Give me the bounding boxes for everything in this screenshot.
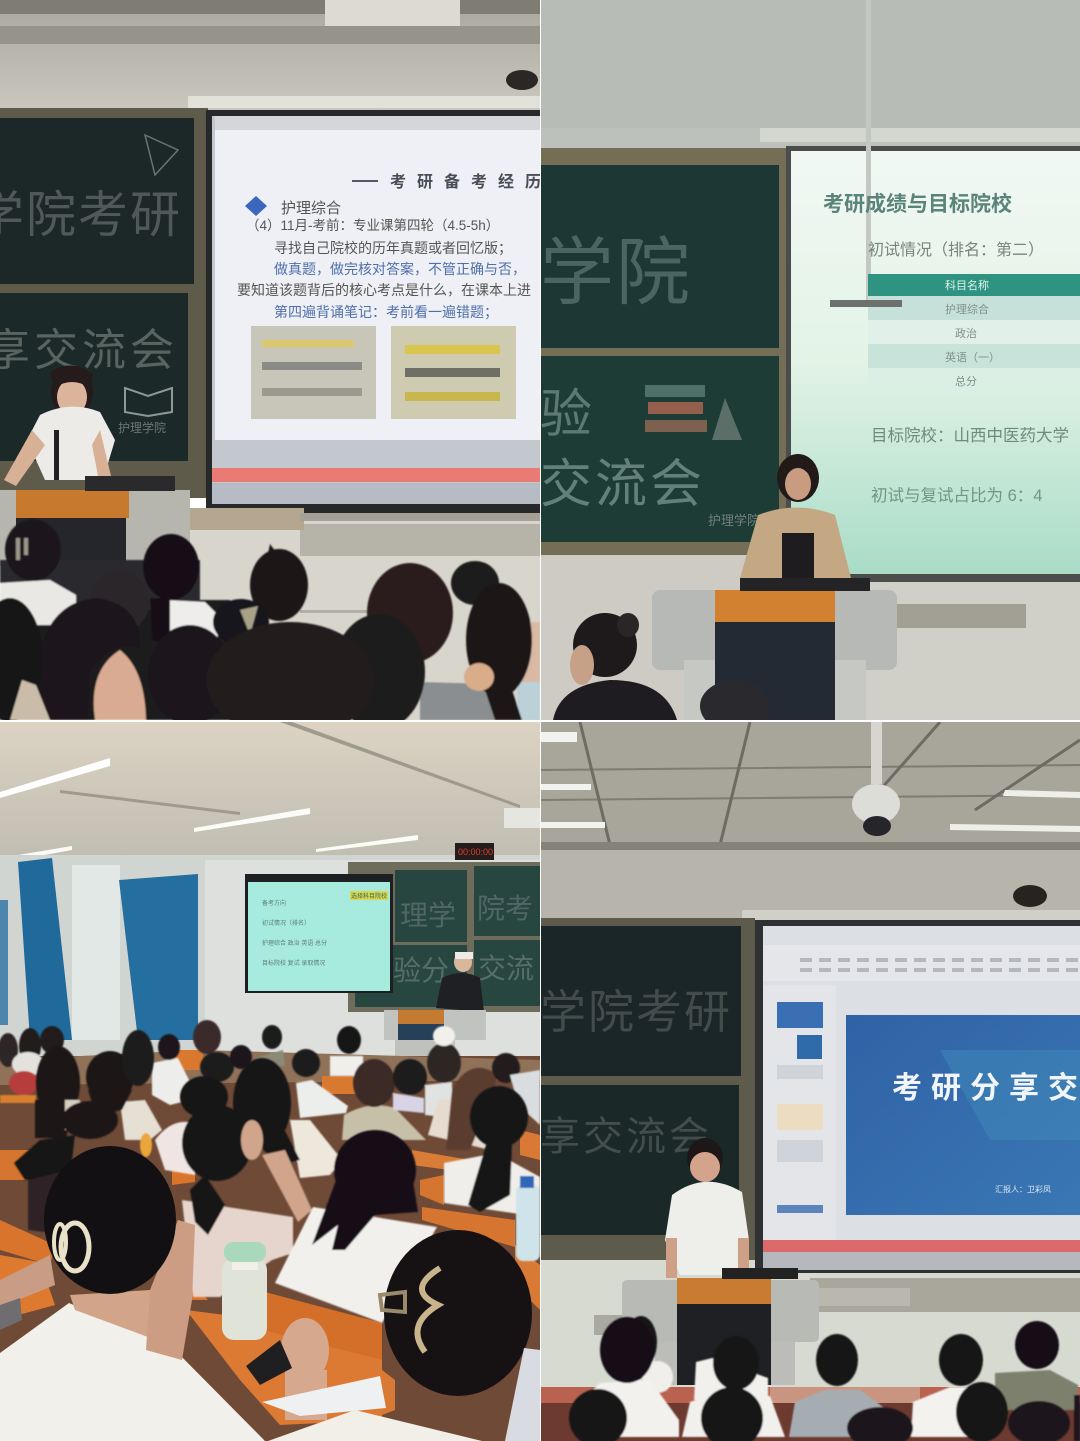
blackboard [348, 843, 540, 1012]
ceiling [541, 722, 1080, 850]
projection screen: 第四遍背诵笔记：考前看一遍错题； [274, 304, 498, 321]
ceiling and wall [0, 0, 540, 110]
speaker and podium [384, 952, 486, 1062]
blackboard [540, 918, 755, 1260]
audience [0, 519, 540, 738]
panel: top-left lecture photo [0, 0, 552, 720]
window and curtains [0, 858, 198, 1040]
projection screen [245, 874, 393, 993]
blackboard: 享交流会 [540, 1115, 712, 1159]
projection screen: 目标院校：山西中医药大学 [871, 426, 1069, 445]
projection screen: 政治 [955, 326, 977, 340]
projection screen: 科目名称 [945, 278, 989, 292]
projection screen: 考研成绩与目标院校 [823, 192, 1012, 216]
projection screen [206, 110, 552, 515]
projection screen: 护理综合 [945, 302, 989, 316]
blackboard: 验分 [393, 955, 449, 986]
blackboard: 验 [540, 386, 592, 444]
projection screen [755, 920, 1080, 1273]
distant students [0, 1020, 540, 1150]
podium [0, 476, 190, 570]
crossbar [830, 300, 902, 307]
projection screen: 考研备考经历 [390, 172, 552, 191]
projection screen: 英语（一） [945, 350, 1000, 364]
panel: bottom-left classroom photo [0, 722, 540, 1441]
podium [622, 1268, 819, 1385]
floor and chair rows [541, 1387, 1080, 1441]
projection screen: 要知道该题背后的核心考点是什么，在课本上进 [237, 282, 531, 298]
student seated [553, 613, 770, 732]
wall under screen [541, 1260, 1080, 1390]
speaker [665, 1138, 749, 1278]
blackboard: 护理学院 [118, 420, 166, 435]
blackboard: 00:00:00 [458, 847, 493, 857]
projection screen: 备考方向 [262, 899, 286, 907]
audience [569, 1316, 1080, 1441]
blackboard: 交流会 [540, 456, 705, 514]
projection screen: 护理综合 [281, 200, 341, 217]
blackboard: 学院考研 [540, 986, 732, 1038]
speaker [740, 454, 851, 580]
icon: small metal clip [380, 1292, 405, 1312]
wall under screen [541, 555, 1080, 720]
mid students [14, 1030, 540, 1323]
blackboard: 理学 [400, 900, 456, 931]
wall and ceiling [541, 0, 1080, 160]
projection screen: 护理综合 政治 英语 总分 [262, 939, 327, 947]
panel: top-right lecture photo [540, 0, 1080, 720]
projection screen: 初试与复试占比为 6：4 [871, 486, 1042, 505]
blackboard [0, 108, 208, 498]
wall under screen [190, 508, 540, 720]
ceiling [0, 722, 540, 880]
blackboard: 学院 [540, 231, 692, 314]
blackboard [540, 148, 791, 563]
projection screen: 汇报人：卫彩凤 [995, 1184, 1051, 1194]
projection screen [786, 0, 1080, 582]
projection screen: 选择科目院校 [351, 892, 387, 900]
desks [0, 1050, 540, 1441]
icon: security camera [852, 722, 900, 836]
projection screen: 初试情况（排名：第二） [868, 241, 1044, 259]
wall [541, 850, 1080, 920]
projection screen: 目标院校 复试 录取情况 [262, 959, 325, 967]
blackboard: 院考 [477, 893, 533, 924]
projection screen: 寻找自己院校的历年真题或者回忆版； [274, 240, 512, 257]
projection screen: 总分 [955, 374, 977, 388]
panel: bottom-right classroom photo [540, 722, 1080, 1441]
projection screen: （4）11月-考前：专业课第四轮（4.5-5h） [246, 217, 499, 233]
icon: gold hair claw [417, 1268, 440, 1352]
foreground students [0, 1146, 540, 1441]
back wall [0, 855, 540, 1060]
blackboard: 护理学院 [708, 513, 760, 528]
speaker [4, 365, 115, 486]
blackboard: 交流 [478, 953, 534, 984]
projection screen: 做真题，做完核对答案，不管正确与否， [274, 261, 526, 277]
projection screen: 初试情况（排名） [262, 919, 310, 927]
phone at right edge [505, 1348, 540, 1441]
icon: pearl hair clip [54, 1223, 89, 1271]
podium [652, 578, 897, 720]
